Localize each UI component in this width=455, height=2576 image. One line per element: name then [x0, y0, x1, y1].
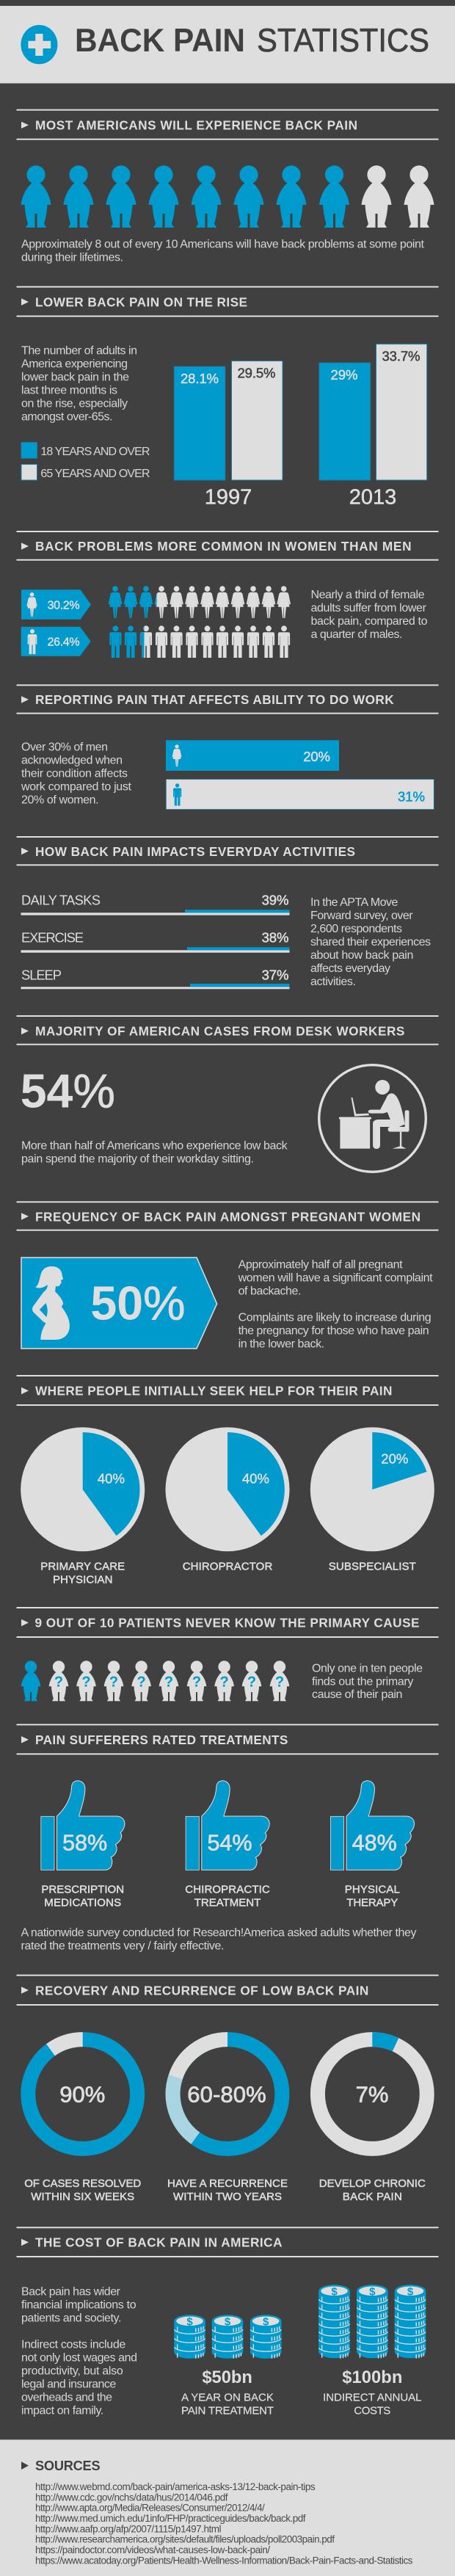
- bar chart: 29%: [330, 367, 358, 382]
- text block: [21, 2286, 137, 2417]
- icon: thumb 58%: [41, 1781, 125, 1909]
- heading: MAJORITY OF AMERICAN CASES FROM DESK WORKERS: [35, 1024, 404, 1039]
- ring: 7%: 7%: [356, 2081, 388, 2107]
- stat: exercise: 38%: [262, 930, 288, 946]
- legend: 65 YEARS AND OVER: [40, 468, 150, 480]
- legend: [21, 443, 150, 480]
- panel: women versus men: [16, 531, 439, 658]
- stat: $50bn: A YEAR ON BACK: [181, 2392, 274, 2404]
- pictogram: 1 of 10 people: ?: [219, 1675, 229, 1691]
- text block: in the lower back.: [239, 1338, 324, 1350]
- pictogram: 1 of 10 people: [21, 1661, 289, 1701]
- source list: http://www.cdc.gov/nchs/data/hus/2014/046.pdf: [35, 2492, 228, 2503]
- text block: pain spend the majority of their workday sitting.: [21, 1153, 254, 1166]
- text block: activities.: [310, 976, 356, 988]
- text block: [238, 1258, 433, 1350]
- icon: thumb 54%: CHIROPRACTIC: [185, 1883, 270, 1895]
- ring: 60-80%: 60-80%: [187, 2081, 266, 2107]
- text block: finds out the primary: [312, 1675, 413, 1688]
- heading: FREQUENCY OF BACK PAIN AMONGST PREGNANT WOMEN: [35, 1209, 421, 1224]
- heading: [16, 1015, 439, 1045]
- badge: women 30.2%: 30.2%: [48, 599, 80, 612]
- text block: financial implications to: [21, 2299, 136, 2312]
- text block: during their lifetimes.: [21, 251, 123, 264]
- text block: Complaints are likely to increase during: [239, 1311, 432, 1324]
- text block: Forward survey, over: [310, 910, 413, 922]
- heading: [16, 836, 439, 866]
- stat: sleep: 37%: [262, 968, 288, 983]
- text block: overheads and the: [21, 2392, 112, 2404]
- panel: where people seek help: [16, 1375, 439, 1586]
- ring: 90%: WITHIN SIX WEEKS: [31, 2191, 134, 2203]
- pictogram: 1 of 10 people: ?: [164, 1675, 173, 1691]
- legend: 18 YEARS AND OVER: [40, 446, 150, 458]
- panel: rated treatments: [16, 1724, 439, 1952]
- source list: https://paindoctor.com/videos/what-causes-low-back-pain/: [35, 2544, 270, 2555]
- panel: sources: [0, 2439, 455, 2576]
- text block: amongst over-65s.: [21, 410, 113, 423]
- text block: their condition affects: [21, 768, 128, 780]
- text block: America experiencing: [21, 358, 128, 370]
- source list: http://www.webmd.com/back-pain/america-asks-13/12-back-pain-tips: [35, 2481, 316, 2492]
- icon: thumb 54%: TREATMENT: [194, 1896, 261, 1909]
- text block: In the APTA Move: [310, 896, 398, 909]
- bar chart: 29.5%: [238, 366, 276, 381]
- pie: subspecialist: [310, 1427, 434, 1572]
- title: STATISTICS: [257, 23, 429, 59]
- pictogram: 8 of 10 people: [21, 165, 434, 228]
- text block: cause of their pain: [312, 1688, 402, 1701]
- bar chart: [174, 344, 427, 509]
- icon: thumb 58%: PRESCRIPTION: [41, 1883, 124, 1895]
- title: [75, 23, 429, 59]
- heading: [16, 2227, 439, 2257]
- icon: thumb 48%: 48%: [352, 1831, 397, 1856]
- pie: chiropractor: 40%: [242, 1471, 269, 1487]
- source list: http://www.med.umich.edu/1info/FHP/practiceguides/back/back.pdf: [35, 2513, 306, 2524]
- bar: women 20%: 20%: [303, 749, 330, 764]
- heading: BACK PROBLEMS MORE COMMON IN WOMEN THAN MEN: [35, 539, 411, 554]
- stat: $100bn: [323, 2368, 421, 2417]
- text block: Indirect costs include: [21, 2339, 125, 2351]
- panel: cost of back pain: [16, 2227, 439, 2417]
- icon: thumb 48%: PHYSICAL: [345, 1883, 400, 1895]
- title: BACK PAIN: [75, 23, 245, 59]
- text block: women will have a significant complaint: [238, 1271, 433, 1284]
- ring: 60-80%: [167, 2039, 288, 2203]
- badge: 50%: [21, 1258, 217, 1349]
- icon: medical cross: [21, 25, 57, 64]
- pie: primary care physician: [21, 1427, 145, 1586]
- text block: a quarter of males.: [311, 628, 402, 641]
- icon: coin stacks $50bn: [174, 2315, 282, 2359]
- bar chart: 33.7%: [382, 348, 420, 363]
- stat: daily tasks: [21, 893, 289, 915]
- source list: [35, 2481, 413, 2566]
- stat: daily tasks: DAILY TASKS: [21, 893, 101, 908]
- heading: RECOVERY AND RECURRENCE OF LOW BACK PAIN: [35, 1983, 368, 1998]
- source list: http://www.researchamerica.org/sites/default/files/uploads/poll2003pain.pdf: [35, 2534, 335, 2545]
- badge: 50%: 50%: [90, 1277, 186, 1329]
- heading: [16, 1201, 439, 1231]
- text block: Over 30% of men: [21, 741, 108, 754]
- panel: primary cause: [16, 1607, 439, 1701]
- source list: http://www.aafp.org/afp/2007/1115/p1497.html: [35, 2523, 222, 2534]
- bar: men 31%: [166, 780, 434, 809]
- text block: [21, 1140, 288, 1166]
- stat: $100bn: COSTS: [354, 2405, 390, 2417]
- ring: 90%: OF CASES RESOLVED: [24, 2177, 141, 2190]
- pie: chiropractor: CHIROPRACTOR: [183, 1560, 272, 1572]
- text block: 20% of women.: [21, 794, 99, 807]
- text block: not only lost wages and: [21, 2352, 137, 2365]
- ring: 90%: [24, 2039, 141, 2203]
- text block: More than half of Americans who experience low back: [21, 1140, 288, 1153]
- text block: 2,600 respondents: [310, 923, 402, 935]
- panel: pregnant women: [16, 1201, 439, 1350]
- heading: REPORTING PAIN THAT AFFECTS ABILITY TO DO WORK: [35, 692, 394, 707]
- pictogram: 1 of 10 people: ?: [247, 1675, 256, 1691]
- heading: PAIN SUFFERERS RATED TREATMENTS: [35, 1733, 288, 1747]
- text block: lower back pain in the: [21, 371, 129, 383]
- ring: 60-80%: WITHIN TWO YEARS: [173, 2191, 282, 2203]
- pie: primary care physician: 40%: [98, 1471, 125, 1487]
- heading: [16, 1375, 439, 1406]
- text block: [312, 1662, 423, 1701]
- ring: 60-80%: HAVE A RECURRENCE: [167, 2177, 288, 2190]
- icon: thumb 48%: [330, 1781, 415, 1909]
- icon: coin stacks $100bn: [318, 2285, 426, 2359]
- text block: legal and insurance: [21, 2379, 116, 2391]
- stat: exercise: EXERCISE: [21, 930, 84, 946]
- pictogram: 1 of 10 people: ?: [54, 1675, 63, 1691]
- icon: thumb 54%: 54%: [207, 1831, 252, 1856]
- pie: subspecialist: SUBSPECIALIST: [329, 1560, 416, 1572]
- stat: sleep: SLEEP: [21, 968, 62, 983]
- text block: [21, 1926, 417, 1952]
- text block: [311, 589, 428, 641]
- bar chart: 2013: [349, 486, 396, 509]
- stat: $50bn: PAIN TREATMENT: [181, 2405, 274, 2417]
- text block: shared their experiences: [310, 936, 431, 948]
- panel: everyday activities: [16, 836, 439, 989]
- bar chart: 1997: [205, 486, 252, 509]
- text block: [21, 238, 425, 264]
- heading: [16, 109, 439, 140]
- text block: work compared to just: [21, 781, 132, 794]
- heading: WHERE PEOPLE INITIALLY SEEK HELP FOR THEIR PAIN: [35, 1384, 392, 1398]
- pie: chiropractor: [166, 1427, 289, 1572]
- ring: 7%: [318, 2039, 427, 2203]
- stat: $50bn: $50bn: [202, 2368, 252, 2387]
- text block: Back pain has wider: [21, 2286, 121, 2299]
- bar chart: 28.1%: [181, 371, 219, 386]
- pie: primary care physician: PRIMARY CARE: [40, 1560, 125, 1572]
- pictogram: women row: [109, 586, 291, 618]
- ring: 7%: BACK PAIN: [343, 2191, 402, 2203]
- text block: Approximately half of all pregnant: [239, 1258, 403, 1271]
- pictogram: 1 of 10 people: ?: [81, 1675, 91, 1691]
- text block: Only one in ten people: [312, 1662, 423, 1675]
- badge: women 30.2%: [21, 589, 91, 620]
- panel: recovery and recurrence: [16, 1975, 439, 2203]
- heading: [16, 1975, 439, 2006]
- heading: [16, 1607, 439, 1638]
- text block: adults suffer from lower: [311, 602, 427, 614]
- panel: desk workers: [16, 1015, 439, 1172]
- text block: last three months is: [21, 384, 117, 396]
- pictogram: 1 of 10 people: ?: [136, 1675, 146, 1691]
- badge: men 26.4%: [21, 627, 91, 656]
- heading: THE COST OF BACK PAIN IN AMERICA: [35, 2235, 282, 2250]
- text block: productivity, but also: [21, 2365, 123, 2378]
- panel: ability to do work: [16, 684, 439, 809]
- pictogram: 1 of 10 people: ?: [275, 1675, 284, 1691]
- bar: women 20%: [166, 740, 339, 771]
- icon: person at desk: [319, 1065, 426, 1172]
- stat: $100bn: $100bn: [342, 2368, 402, 2387]
- source list: https://www.acatoday.org/Patients/Health-Wellness-Information/Back-Pain-Facts-and-Statistics: [35, 2555, 413, 2566]
- stat: $50bn: [181, 2368, 274, 2417]
- heading: [16, 1724, 439, 1755]
- ring: 90%: 90%: [59, 2081, 105, 2107]
- header banner: [0, 6, 455, 84]
- icon: thumb 58%: MEDICATIONS: [44, 1896, 121, 1909]
- heading: [16, 286, 439, 317]
- text block: rated the treatments very / fairly effective.: [21, 1940, 225, 1952]
- text block: the pregnancy for those who have pain: [239, 1324, 429, 1337]
- text block: patients and society.: [21, 2312, 121, 2325]
- text block: Nearly a third of female: [311, 589, 425, 601]
- text block: of backache.: [239, 1285, 301, 1297]
- text block: Approximately 8 out of every 10 Americans will have back problems at some point: [21, 238, 425, 250]
- text block: impact on family.: [21, 2405, 103, 2417]
- icon: thumb 58%: 58%: [62, 1831, 107, 1856]
- text block: [21, 344, 137, 423]
- source list: http://www.apta.org/Media/Releases/Consumer/2012/4/4/: [35, 2503, 265, 2514]
- text block: [310, 896, 431, 988]
- pictogram: men row: [109, 625, 290, 658]
- badge: men 26.4%: 26.4%: [48, 636, 80, 648]
- heading: HOW BACK PAIN IMPACTS EVERYDAY ACTIVITIES: [35, 844, 355, 859]
- panel: lower back pain on the rise: [16, 286, 439, 509]
- ring: 7%: DEVELOP CHRONIC: [319, 2177, 426, 2190]
- heading: 9 OUT OF 10 PATIENTS NEVER KNOW THE PRIMARY CAUSE: [35, 1616, 420, 1630]
- stat: sleep: [21, 968, 289, 989]
- stat: $100bn: INDIRECT ANNUAL: [323, 2392, 421, 2404]
- big number: 54%: [21, 1064, 115, 1117]
- text block: back pain, compared to: [311, 615, 428, 628]
- bar: men 31%: 31%: [398, 788, 425, 804]
- pictogram: 1 of 10 people: ?: [109, 1675, 118, 1691]
- heading: MOST AMERICANS WILL EXPERIENCE BACK PAIN: [35, 117, 357, 132]
- text block: The number of adults in: [21, 344, 137, 357]
- text block: [21, 741, 132, 807]
- heading: [16, 531, 439, 561]
- icon: thumb 54%: [185, 1781, 270, 1909]
- stat: daily tasks: 39%: [262, 893, 288, 908]
- text block: on the rise, especially: [21, 397, 128, 410]
- text block: acknowledged when: [21, 755, 123, 767]
- icon: thumb 48%: THERAPY: [346, 1896, 398, 1909]
- pictogram: 1 of 10 people: ?: [192, 1675, 201, 1691]
- text block: affects everyday: [310, 962, 390, 975]
- pie: primary care physician: PHYSICIAN: [53, 1573, 112, 1586]
- pie: subspecialist: 20%: [381, 1451, 408, 1466]
- text block: A nationwide survey conducted for Research!America asked adults whether they: [21, 1926, 417, 1939]
- stat: exercise: [21, 930, 289, 953]
- heading: LOWER BACK PAIN ON THE RISE: [35, 294, 247, 309]
- icon: pregnant silhouette: [32, 1266, 70, 1340]
- panel: most Americans: [16, 109, 439, 264]
- heading: SOURCES: [35, 2459, 101, 2473]
- text block: about how back pain: [310, 949, 413, 962]
- heading: [16, 684, 439, 714]
